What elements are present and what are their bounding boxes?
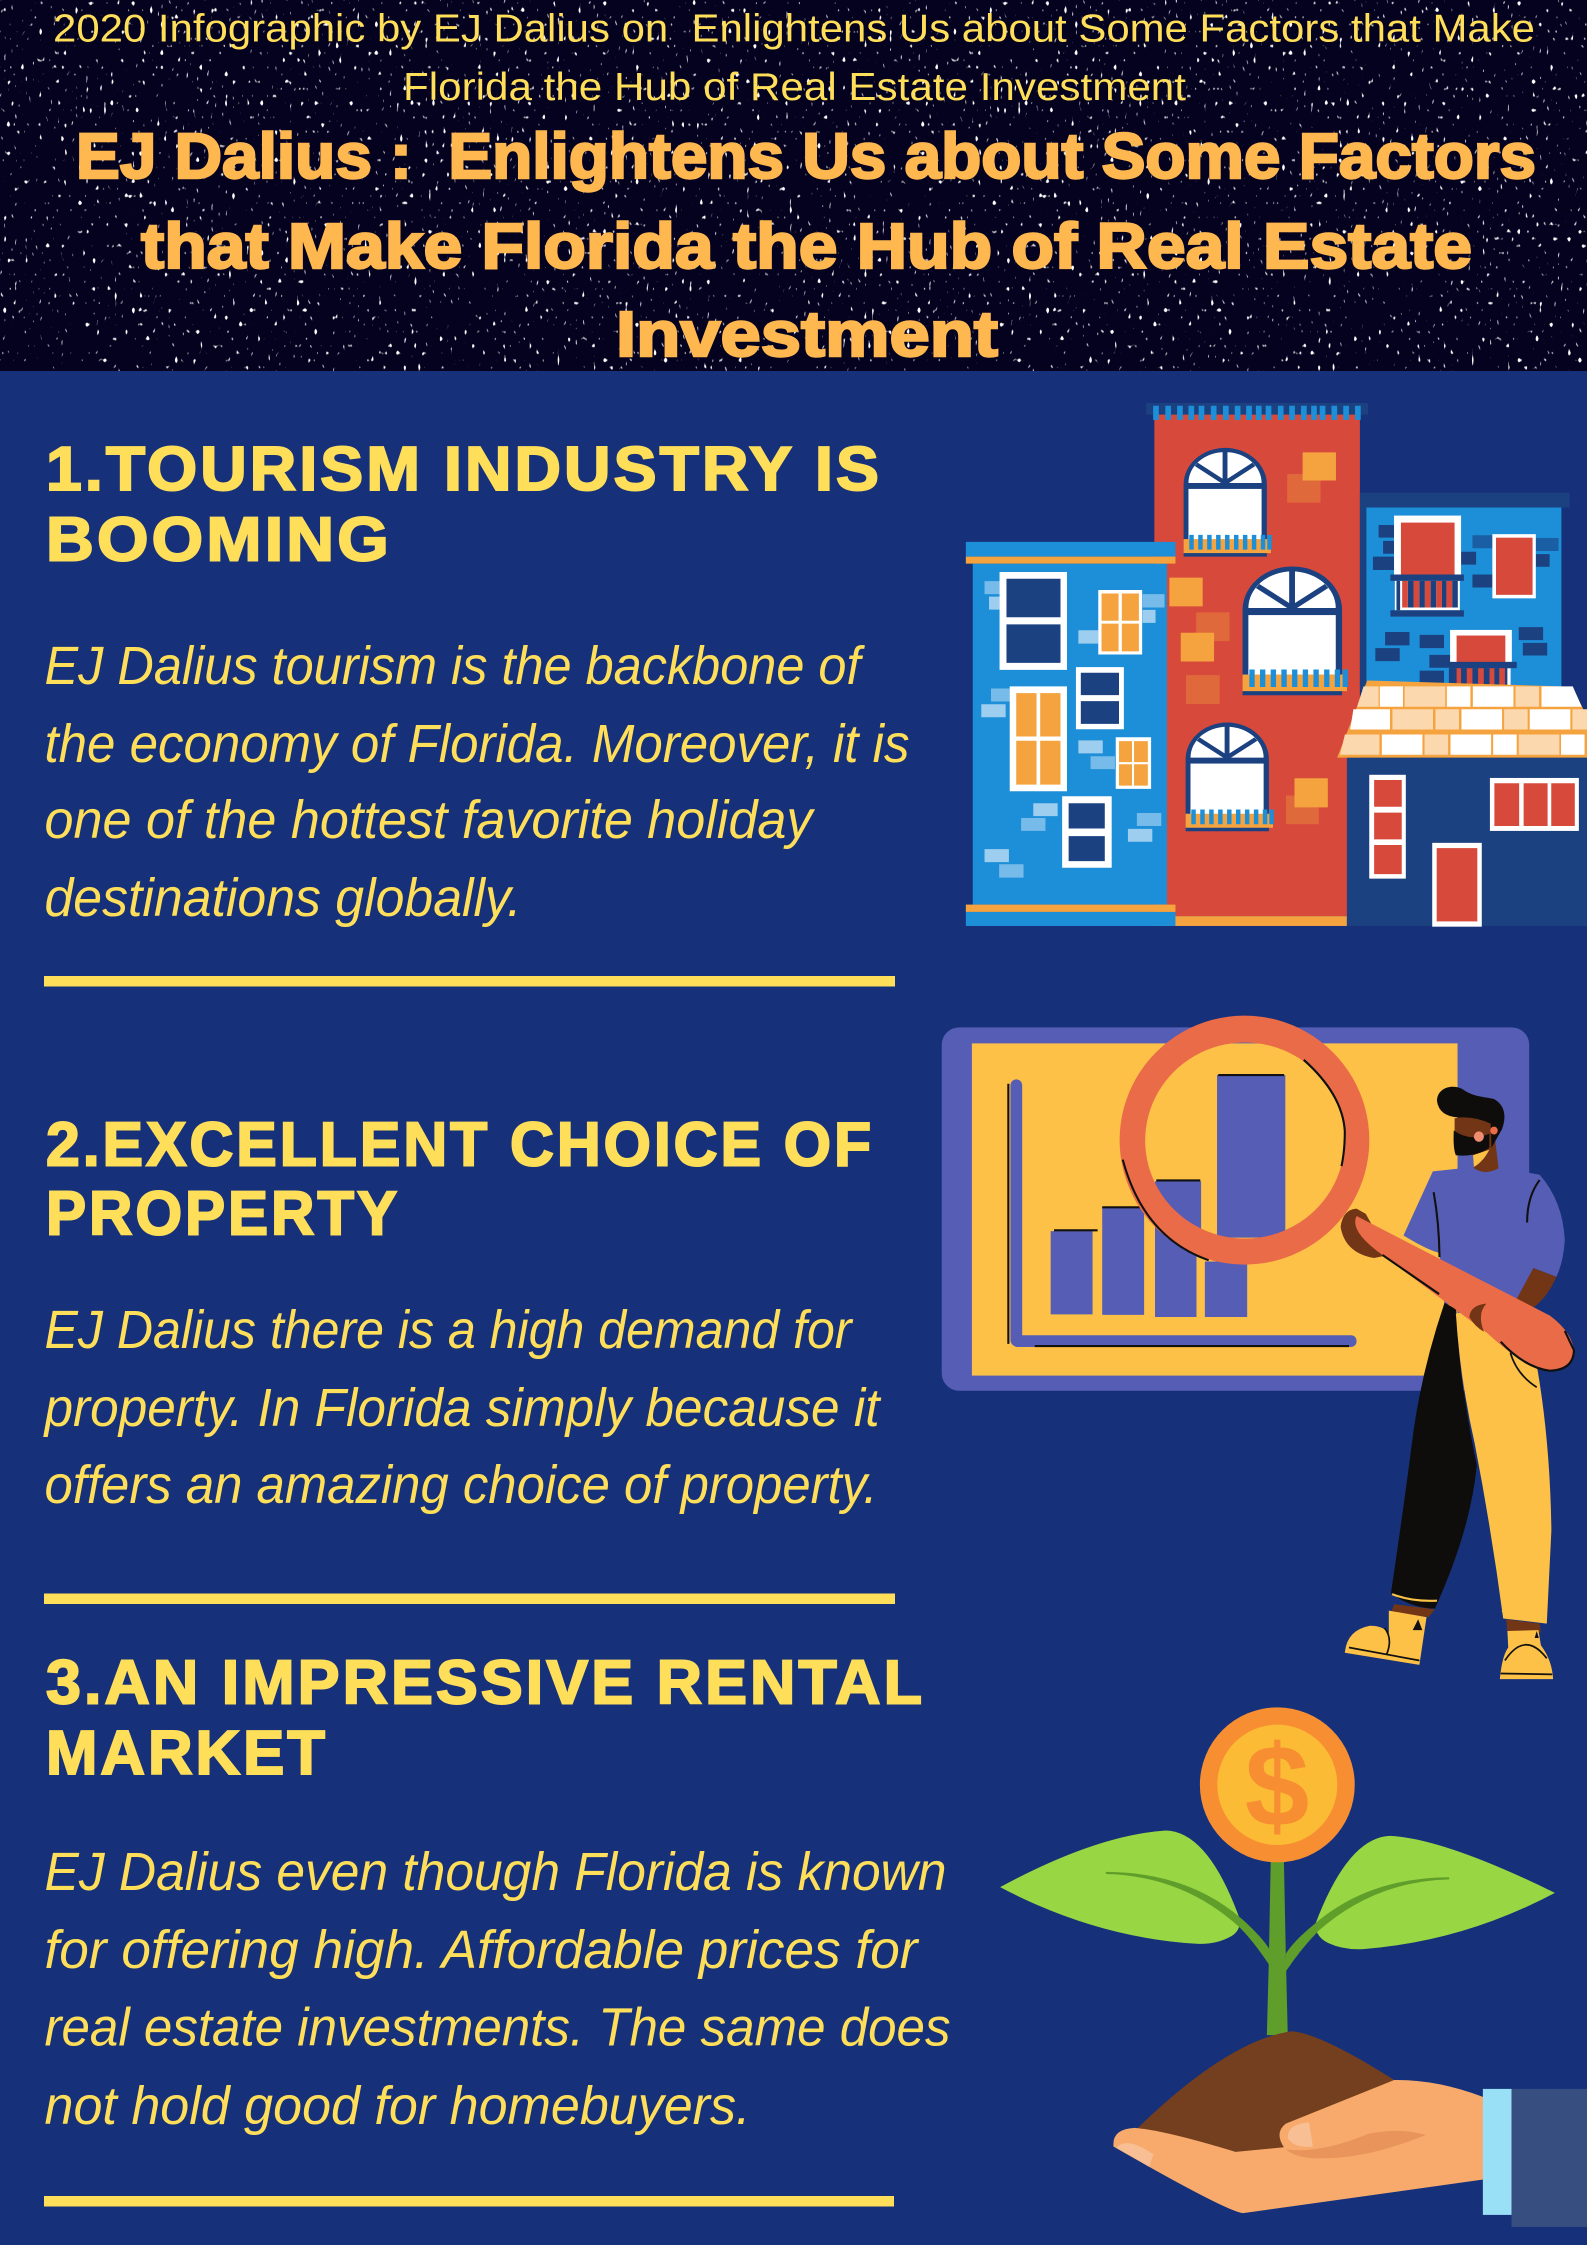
body text 3: EJ Dalius even though Florida is known [44, 1842, 946, 1902]
heading 2: PROPERTY [46, 1180, 400, 1248]
heading 1 [46, 435, 882, 574]
divider 3 [44, 2196, 894, 2206]
heading 2: 2.EXCELLENT CHOICE OF [46, 1110, 874, 1180]
man [1345, 1087, 1565, 1679]
heading 3: 3.AN IMPRESSIVE RENTAL [46, 1648, 925, 1718]
hand and sleeve [1113, 2080, 1587, 2227]
main title: that Make Florida the Hub of Real Estate [141, 210, 1472, 282]
dollar sign: $ [1245, 1721, 1309, 1851]
main title: Investment [616, 298, 998, 370]
body text 2 [43, 1300, 881, 1515]
illustration: money plant on hand [1000, 1707, 1587, 2227]
body text 1: destinations globally. [44, 868, 522, 928]
body text 3: real estate investments. The same does [44, 1998, 950, 2058]
illustration: colourful buildings [966, 403, 1587, 927]
star field [0, 0, 1587, 371]
body text 2: offers an amazing choice of property. [44, 1455, 878, 1515]
red tower [1146, 403, 1368, 926]
body text 1: EJ Dalius tourism is the backbone of [44, 636, 865, 696]
header panel: starry night [0, 0, 1587, 371]
heading 1: 1.TOURISM INDUSTRY IS [46, 435, 882, 504]
main title: EJ Dalius : Enlightens Us about Some Factors [76, 120, 1536, 192]
body text 3: for offering high. Affordable prices for [44, 1920, 919, 1980]
small headline: Florida the Hub of Real Estate Investment [403, 66, 1186, 109]
body text 1 [44, 636, 910, 928]
heading 2 [46, 1110, 874, 1248]
divider 1 [44, 976, 895, 986]
body text 1: the economy of Florida. Moreover, it is [44, 714, 910, 774]
front house with tiled roof [1337, 680, 1587, 927]
body text 2: property. In Florida simply because it [43, 1378, 881, 1438]
plant stem and leaves [1000, 1831, 1555, 2035]
chart board [942, 1027, 1529, 1391]
body text 3 [44, 1842, 950, 2136]
section 1: tourism industry [44, 435, 910, 986]
small headline [53, 8, 1535, 109]
magnifying glass [1120, 1016, 1574, 1371]
divider 2 [44, 1594, 895, 1604]
heading 1: BOOMING [46, 506, 392, 574]
coin [1200, 1707, 1355, 1862]
body text 2: EJ Dalius there is a high demand for [44, 1300, 853, 1360]
soil [1137, 2031, 1394, 2152]
section 3: rental market [44, 1648, 950, 2206]
small headline: 2020 Infographic by EJ Dalius on Enlightens Us about Some Factors that Make [53, 8, 1535, 50]
right blue building [1360, 493, 1570, 690]
illustration: chart and man with magnifying glass [942, 1016, 1574, 1679]
body text 1: one of the hottest favorite holiday [44, 790, 815, 850]
heading 3: MARKET [46, 1719, 328, 1788]
main title [76, 120, 1536, 370]
section 2: choice of property [43, 1110, 895, 1604]
body text 3: not hold good for homebuyers. [44, 2076, 750, 2136]
heading 3 [46, 1648, 925, 1788]
left blue building [966, 542, 1175, 926]
